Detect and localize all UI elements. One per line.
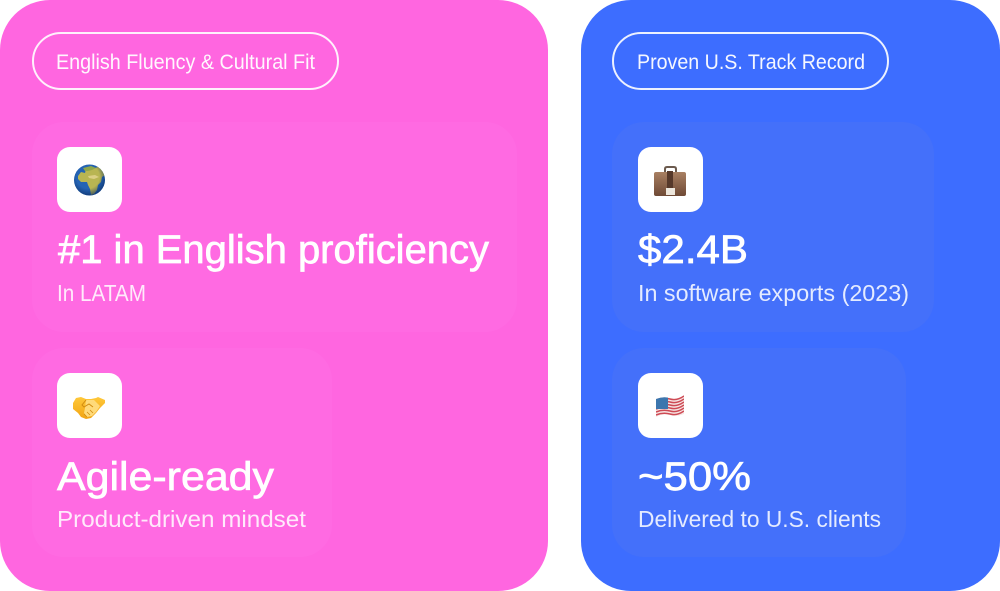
pill heading: English Fluency & Cultural Fit: English Fluency & Cultural Fit: [56, 51, 315, 74]
panel: English Fluency and Cultural Fit: [0, 0, 548, 591]
pill heading: Proven U.S. Track Record: Proven U.S. Track Record: [637, 51, 865, 74]
caption: Delivered to U.S. clients: Delivered to U.S. clients: [638, 506, 881, 532]
metric: ~50%: ~50%: [638, 455, 751, 499]
metric: Agile-ready: Agile-ready: [57, 455, 274, 499]
card: ~50%: [638, 373, 880, 527]
caption: Product-driven mindset: Product-driven mindset: [57, 506, 307, 532]
panel: Proven U.S. Track Record: [581, 0, 1000, 591]
pill heading: Proven U.S. Track Record: [613, 33, 888, 89]
caption: In software exports (2023): In software exports (2023): [638, 280, 909, 306]
metric: $2.4B: $2.4B: [638, 228, 748, 272]
card: Agile-ready: [32, 348, 332, 557]
icon: U.S. flag: [638, 373, 703, 438]
metric: #1 in English proficiency: #1 in English proficiency: [58, 228, 489, 272]
pill heading: English Fluency & Cultural Fit: [33, 33, 338, 89]
caption: In LATAM: In LATAM: [57, 280, 146, 306]
card: #1 in English proficiency: [57, 147, 490, 301]
card: $2.4B: [612, 122, 934, 332]
icon: handshake: [57, 373, 122, 438]
icon: briefcase: [638, 147, 703, 212]
icon: globe: [57, 147, 122, 212]
